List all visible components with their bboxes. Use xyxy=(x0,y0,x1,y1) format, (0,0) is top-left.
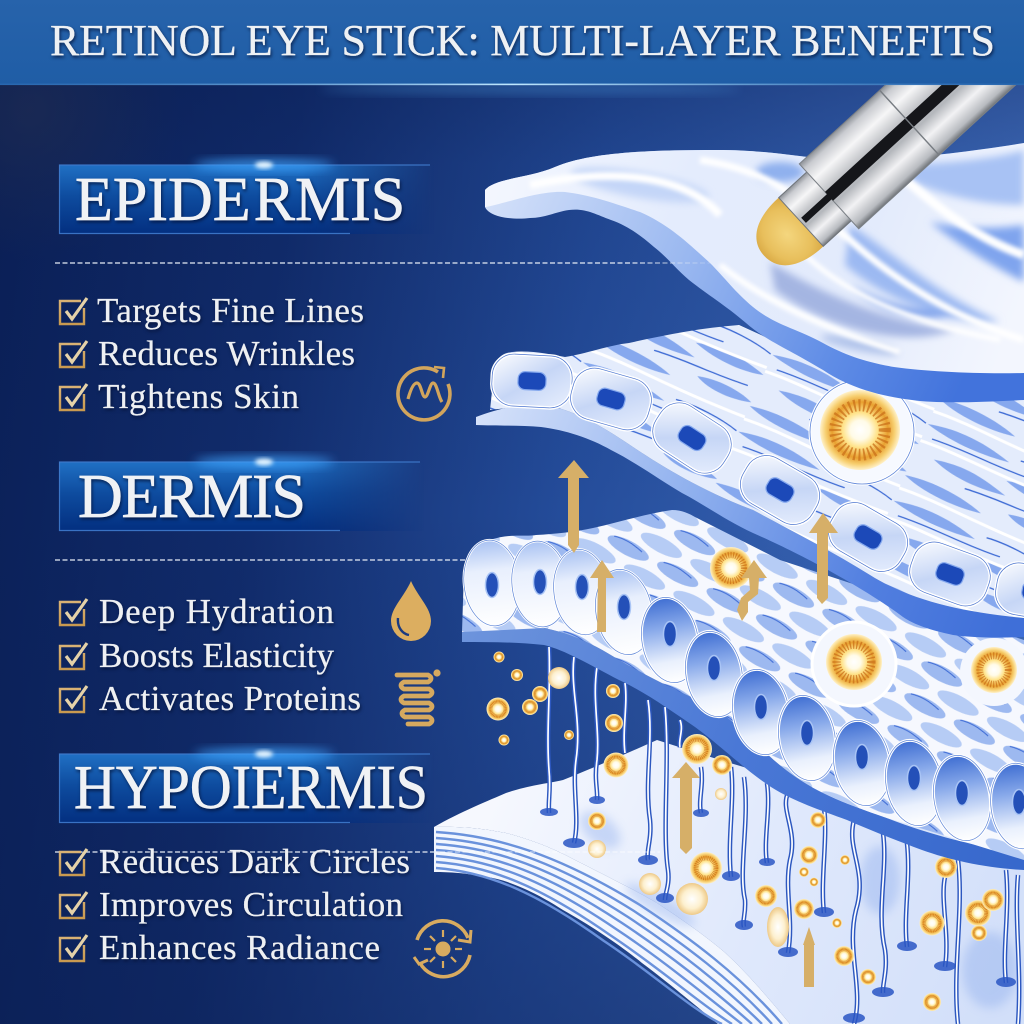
illustration: epidermis lower layer with capsule cells xyxy=(476,325,1024,638)
list: epidermis benefits: Targets Fine Lines xyxy=(97,291,364,330)
hypodermis stacked edge xyxy=(434,827,790,1024)
filaments connecting dermis to hypodermis xyxy=(540,647,1019,1024)
arrow 4 xyxy=(809,513,838,604)
arrow 2 xyxy=(590,560,614,632)
black stripe xyxy=(799,0,1024,224)
heading: dermis: DERMIS xyxy=(78,463,306,531)
list: dermis benefits: Deep Hydration xyxy=(99,592,334,631)
barrel ring xyxy=(880,90,939,155)
arrow 5 xyxy=(672,762,700,854)
list: hypodermis benefits: Enhances Radiance xyxy=(99,928,380,967)
icon: water drop xyxy=(391,581,431,641)
dermis columnar cells xyxy=(460,537,1024,852)
list: hypodermis benefits: Reduces Dark Circles xyxy=(99,842,410,881)
icon: spring xyxy=(397,669,441,724)
sheet edge xyxy=(485,143,1024,402)
list: dermis benefits: Activates Proteins xyxy=(99,679,361,718)
panel: dermis xyxy=(59,456,441,724)
illustration: hypodermis layer xyxy=(434,740,1024,1024)
dashed divider lines xyxy=(55,263,730,852)
illustration: top epidermis sheet xyxy=(485,143,1024,402)
list: hypodermis benefits xyxy=(60,842,410,967)
gold arrows xyxy=(558,460,838,987)
dermis upper tissue xyxy=(462,510,1024,860)
list: epidermis benefits: Reduces Wrinkles xyxy=(98,334,355,373)
arrow 1 xyxy=(558,460,589,553)
heading: epidermis: EPIDERMIS xyxy=(75,166,405,234)
list: hypodermis benefits: Improves Circulation xyxy=(99,885,403,924)
sheet surface xyxy=(485,143,1024,373)
icon: radiance cycle xyxy=(414,921,471,977)
capsule layer band xyxy=(476,404,1024,638)
dermis band xyxy=(462,627,1024,870)
header band xyxy=(0,0,1024,94)
arrow 3 xyxy=(737,560,767,621)
gold tip xyxy=(742,196,825,280)
heading: hypodermis: HYPOIERMIS xyxy=(74,754,428,822)
illustration: dermis cell layer xyxy=(460,510,1024,870)
fibre tissue xyxy=(490,325,1024,618)
panel: epidermis xyxy=(59,159,450,420)
golden cell xyxy=(810,380,914,484)
panel: hypodermis xyxy=(59,748,471,977)
applicator pen xyxy=(734,0,1024,288)
sheet highlights xyxy=(530,150,1024,359)
list: dermis benefits xyxy=(60,592,361,718)
golden cells in dermis xyxy=(710,547,1024,706)
icon: wrinkle smoothing circle xyxy=(398,367,450,420)
list: epidermis benefits: Tightens Skin xyxy=(98,377,299,416)
golden retinol particles xyxy=(486,652,1004,1011)
hypodermis upper surface xyxy=(434,740,1024,1024)
heading: dermis xyxy=(59,456,424,531)
title: RETINOL EYE STICK: MULTI-LAYER BENEFITS xyxy=(50,16,995,65)
capsule cells xyxy=(491,353,1024,625)
list: epidermis benefits xyxy=(60,291,364,416)
pen barrel xyxy=(799,0,1024,229)
hypodermis blue shading xyxy=(573,804,1018,1008)
arrow 6 xyxy=(803,927,815,987)
list: dermis benefits: Boosts Elasticity xyxy=(99,636,334,675)
pen collar xyxy=(779,171,853,246)
dermis cell nuclei xyxy=(486,570,1024,814)
